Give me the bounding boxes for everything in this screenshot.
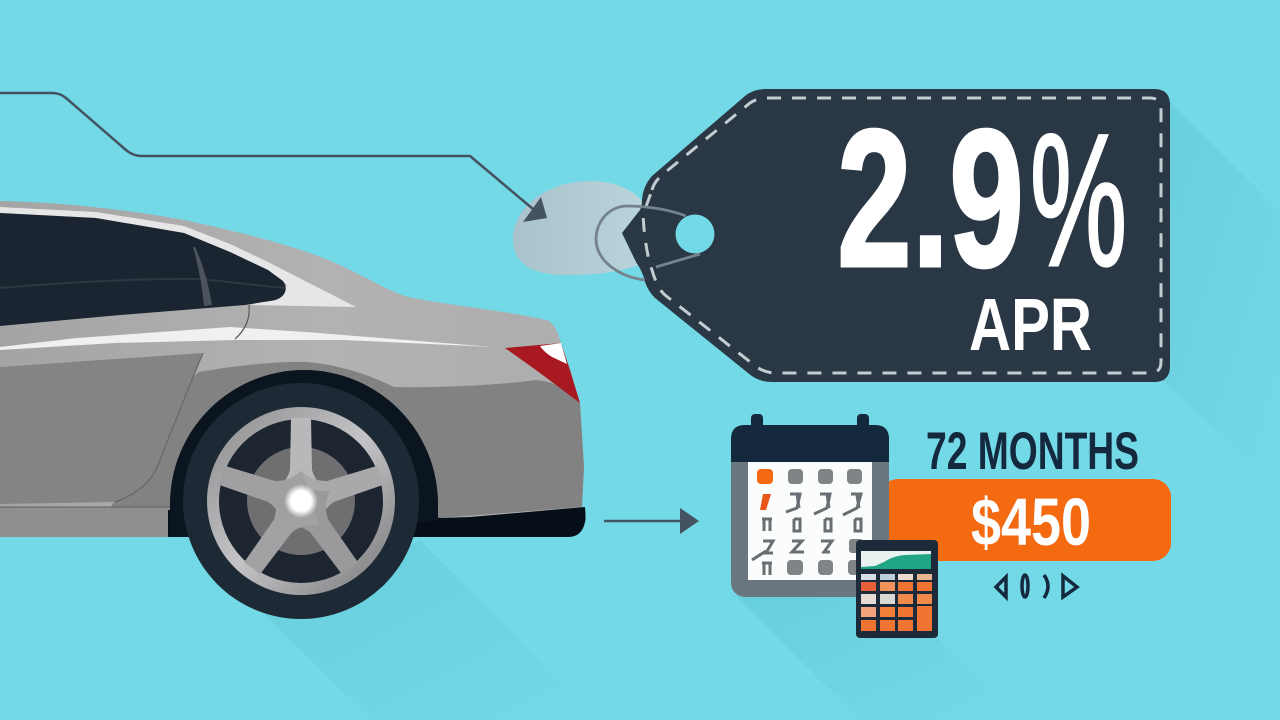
- smudge behind tag: [513, 181, 645, 275]
- roof highlight: [0, 207, 356, 307]
- stitching: [643, 98, 1161, 373]
- tag string: [596, 206, 700, 280]
- calculator: [856, 540, 938, 638]
- bumper: [168, 507, 586, 537]
- wheel interior: [219, 419, 383, 583]
- door seam: [115, 353, 203, 502]
- calculator screen with green chart: [861, 551, 931, 569]
- calendar page: [748, 462, 872, 580]
- calendar: [731, 414, 889, 597]
- term label: 72 MONTHS: [926, 422, 1139, 481]
- APR label: APR: [969, 283, 1092, 366]
- window: [0, 213, 286, 326]
- wheel: [183, 383, 419, 619]
- connector line with arrow to tag: [0, 93, 547, 222]
- spokes: [213, 418, 389, 585]
- calculator case: [856, 540, 938, 638]
- window reflection: [0, 279, 285, 288]
- window pillar: [193, 247, 212, 306]
- rim: [207, 407, 395, 595]
- calculator keys: [861, 574, 932, 631]
- tyre: [183, 383, 419, 619]
- price tag: [596, 89, 1170, 382]
- sill: [0, 507, 172, 537]
- car: [0, 201, 586, 537]
- monthly payment amount: $450: [971, 485, 1091, 560]
- tag body: [622, 89, 1170, 382]
- orange payment bar: [880, 479, 1171, 561]
- door handle seam: [235, 305, 249, 339]
- calendar rings: [751, 414, 763, 438]
- long shadows: [262, 92, 1280, 720]
- rear lower panel: [110, 362, 584, 520]
- tag hole: [676, 214, 714, 254]
- hub: [284, 484, 318, 518]
- tail light: [505, 343, 580, 403]
- car body: [0, 201, 584, 537]
- small arrow to calendar: [604, 508, 699, 534]
- wheel arch: [170, 370, 438, 537]
- calendar frame: [731, 425, 889, 597]
- rate: 2.9: [837, 89, 1024, 308]
- body highlight stripe: [0, 327, 494, 350]
- date cells: [752, 469, 863, 575]
- brake disc: [247, 447, 355, 555]
- price tag: %: [1030, 95, 1127, 305]
- decorative glyph marks under payment: [996, 575, 1077, 598]
- calendar header: [731, 425, 889, 462]
- door panel: [0, 353, 203, 504]
